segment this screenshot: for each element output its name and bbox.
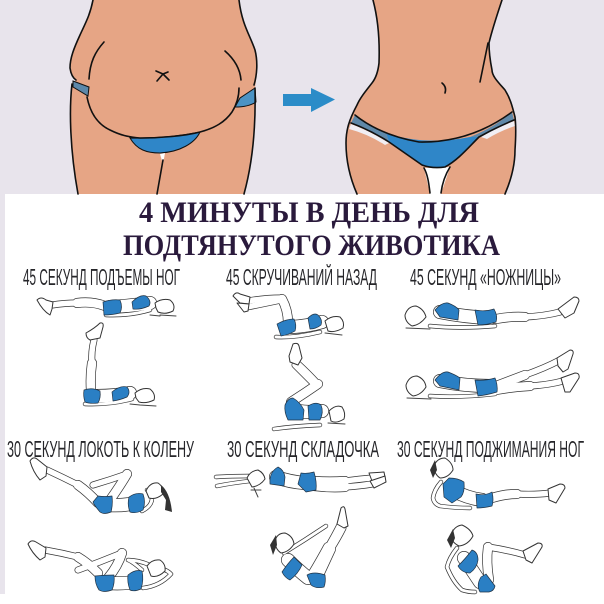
- exercise 1 end: legs raised: [84, 323, 156, 406]
- label: reverse crunches: 45 СКРУЧИВАНИЙ НАЗАД: [226, 263, 377, 290]
- exercise 4 end: other elbow to knee: [28, 541, 171, 592]
- label: fold: 30 СЕКУНД СКЛАДОЧКА: [227, 436, 379, 462]
- title: [123, 196, 500, 262]
- title: ПОДТЯНУТОГО ЖИВОТИКА: [123, 229, 500, 262]
- before figure: wide waist torso: [70, 0, 257, 194]
- exercise 3 end: scissor legs: [406, 350, 579, 399]
- exercise 2 end: hips raised: [274, 343, 345, 429]
- exercise 4 start: elbow to knee: [30, 458, 172, 514]
- exercise 2 start: bent knees: [233, 293, 344, 337]
- top background panel: [0, 0, 604, 194]
- title: 4 МИНУТЫ В ДЕНЬ ДЛЯ: [139, 196, 479, 229]
- exercise 3 start: legs low: [405, 297, 579, 329]
- exercise 5 start: lying stretched: [216, 467, 386, 497]
- after figure: slim waist torso: [346, 0, 516, 194]
- exercise 6 end: knees tucked: [447, 525, 542, 592]
- label: leg raises: 45 СЕКУНД ПОДЪЕМЫ НОГ: [23, 264, 180, 290]
- label: elbow to knee: 30 СЕКУНД ЛОКОТЬ К КОЛЕНУ: [7, 436, 194, 462]
- exercise 1 start: lying flat: [37, 296, 176, 316]
- exercise 6 start: torso raised: [430, 458, 565, 508]
- arrow: [283, 88, 335, 112]
- exercise 5 end: v-sit: [270, 507, 348, 588]
